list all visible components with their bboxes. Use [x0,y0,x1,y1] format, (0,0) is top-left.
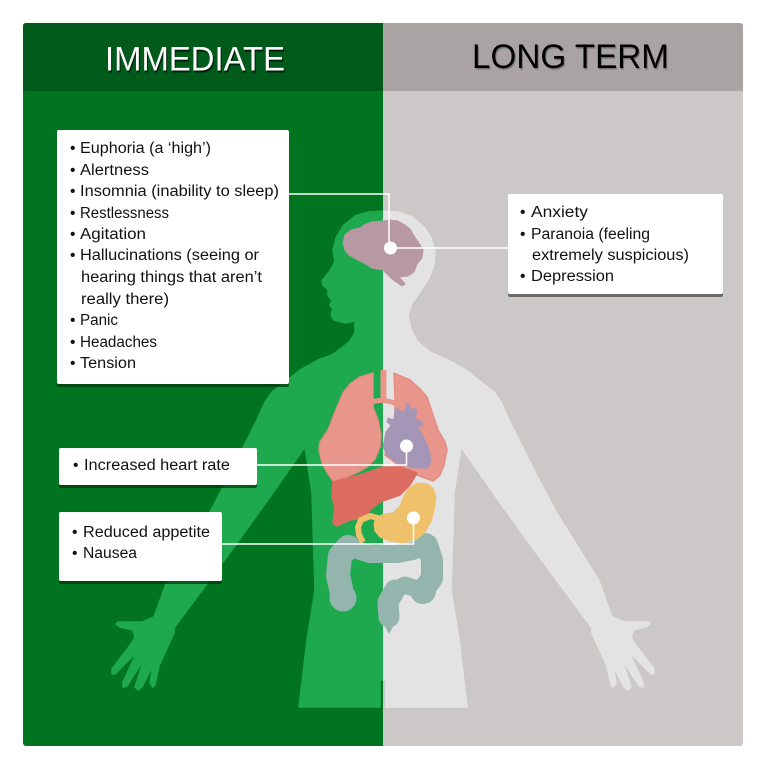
connector: stomach [222,518,414,544]
callout: stomach effects [59,512,222,584]
callout: long term symptoms list: • [520,226,525,243]
body silhouette [112,211,654,707]
callout: immediate symptoms list: hearing things that aren’t [81,269,263,286]
callout: immediate symptoms list: Alertness [80,162,149,179]
callout: immediate symptoms list: Restlessness [80,205,169,222]
callout: long term symptoms list: • [520,204,525,221]
callout: immediate symptoms list: • [70,247,75,264]
heading: long term: LONG TERM [473,40,670,78]
callout: immediate symptoms list: Insomnia (inability to sleep) [80,183,279,200]
marker: stomach [407,512,420,524]
connector: brain to long term list [390,247,508,249]
panel: long term background [383,23,743,746]
panel: immediate background [23,23,383,746]
callout: stomach effects: • [72,545,77,562]
callout: immediate symptoms list: • [70,162,75,179]
callout: immediate symptoms list [57,130,289,387]
callout: long term symptoms list: Paranoia (feeling [531,226,650,243]
organ: colon [330,533,437,634]
callout: immediate symptoms list: • [70,205,75,222]
callout: immediate symptoms list: • [70,140,75,157]
callout: immediate symptoms list: Tension [80,355,136,372]
callout: long term symptoms list: extremely suspicious) [532,247,689,264]
heading: immediate: IMMEDIATE [106,42,286,80]
connector: brain to immediate list [289,194,389,248]
callout: stomach effects: Nausea [83,545,137,562]
callout: immediate symptoms list: • [70,334,75,351]
heading: long term: LONG TERM [472,38,669,76]
callout: immediate symptoms list: really there) [81,291,169,308]
organ: liver [332,467,417,526]
callout: immediate symptoms list: Euphoria (a ‘high’) [80,140,211,157]
organ: pancreas [358,516,378,542]
organ: lungs [319,373,447,481]
marker: brain [384,242,397,254]
callout: heart effect: Increased heart rate [84,457,230,474]
organ: heart [383,403,431,468]
callout: immediate symptoms list: Hallucinations (seeing or [80,247,259,264]
header band: long term [383,23,743,91]
callout: long term symptoms list: Depression [531,268,614,285]
header band: immediate [23,23,383,91]
organ: stomach [374,483,436,543]
callout: immediate symptoms list: • [70,355,75,372]
marker: heart [400,440,413,452]
callout: immediate symptoms list: Headaches [80,334,157,351]
callout: stomach effects: Reduced appetite [83,524,210,541]
callout: heart effect: • [73,457,78,474]
callout: immediate symptoms list: • [70,312,75,329]
connector: heart [257,446,406,465]
callout: long term symptoms list [508,194,723,297]
callout: immediate symptoms list: Agitation [80,226,146,243]
organ: brain [343,220,423,286]
callout: immediate symptoms list: Panic [80,312,118,329]
callout: heart effect [59,448,257,488]
organ: trachea [372,370,397,404]
callout: long term symptoms list: • [520,268,525,285]
callout: long term symptoms list: Anxiety [531,204,588,221]
heading: immediate: IMMEDIATE [105,40,285,78]
callout: immediate symptoms list: • [70,183,75,200]
callout: stomach effects: • [72,524,77,541]
callout: immediate symptoms list: • [70,226,75,243]
